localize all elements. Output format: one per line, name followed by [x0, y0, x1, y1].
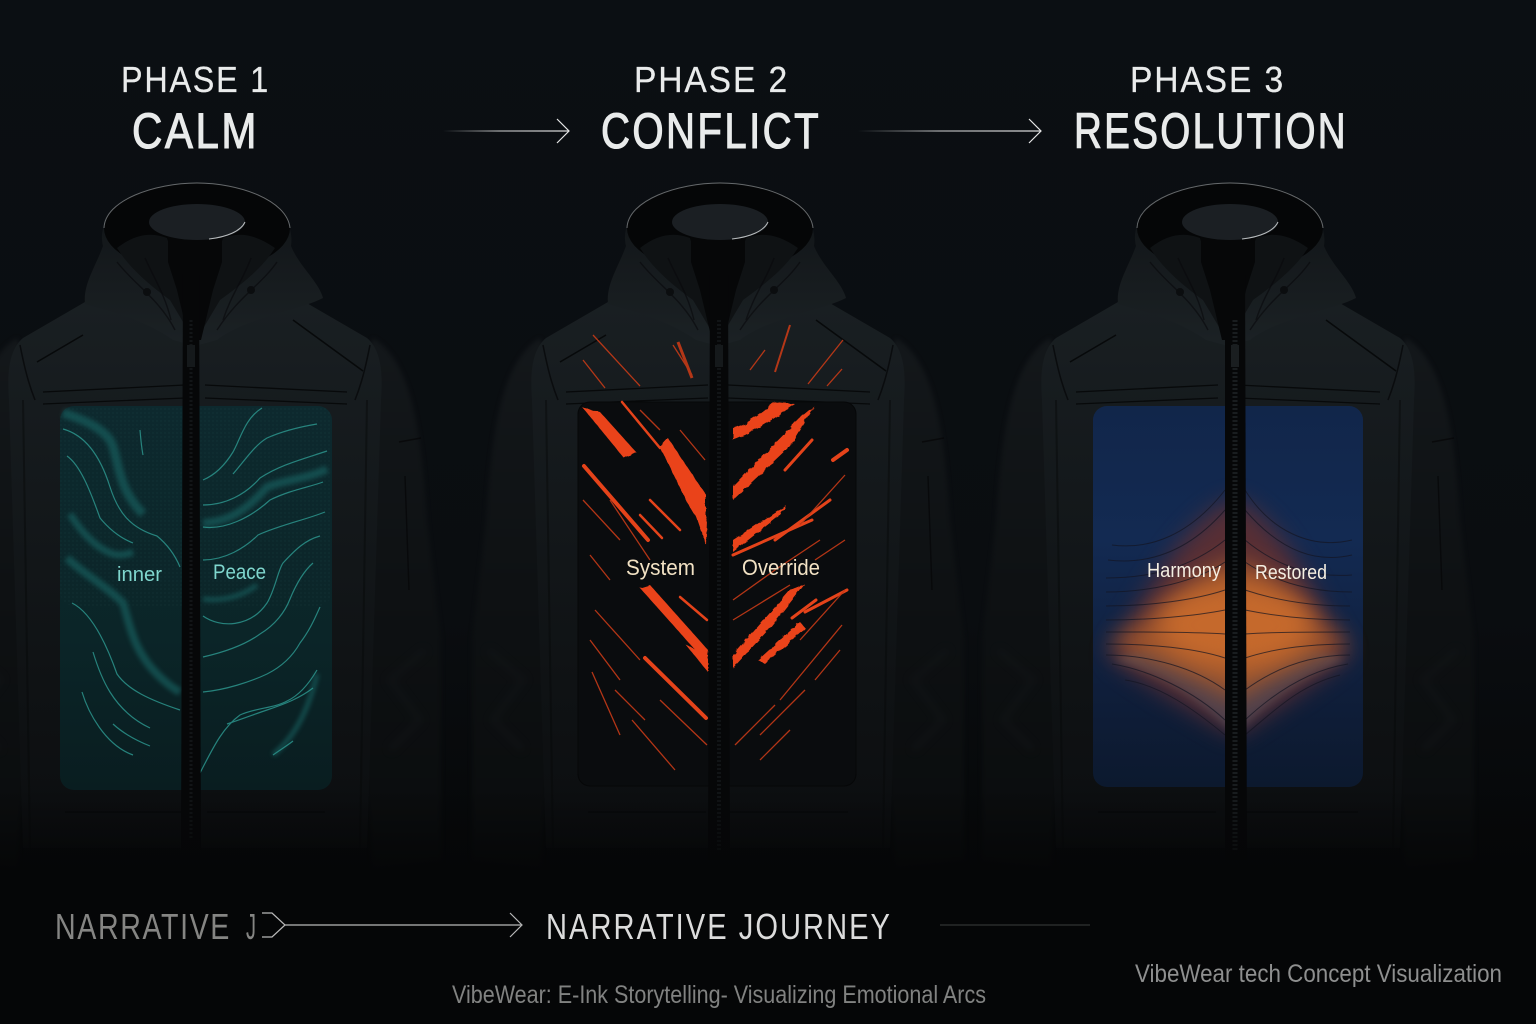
- narrative journey ghost label: J: [246, 906, 256, 947]
- panel: phase 2 conflict jacket: [472, 182, 964, 868]
- text: System: System: [626, 555, 695, 580]
- heading: phase 1: [121, 59, 270, 159]
- heading: phase 3: [1074, 59, 1348, 159]
- jacket silhouette 1: [0, 182, 441, 868]
- text: Override: Override: [742, 555, 820, 580]
- jacket silhouette 2: [472, 182, 964, 868]
- e-ink display: orange slashes: [578, 325, 856, 786]
- caption: title: VibeWear: E-Ink Storytelling- Visualizing Emotional Arcs: [452, 981, 986, 1009]
- heading: phase 1: CALM: [132, 103, 259, 159]
- narrative journey arrow: [262, 913, 522, 937]
- e-ink display: teal waves: [60, 406, 332, 790]
- heading: phase 2: CONFLICT: [601, 103, 821, 159]
- panel: phase 3 resolution jacket: [982, 182, 1474, 868]
- zipper 1: [181, 270, 201, 850]
- heading: phase 1: PHASE 1: [121, 59, 270, 100]
- faint line: [940, 924, 1090, 926]
- heading: phase 3: PHASE 3: [1130, 59, 1285, 100]
- zipper 2: [708, 270, 730, 860]
- heading: phase 2: [601, 59, 821, 159]
- text: Harmony: Harmony: [1147, 560, 1221, 582]
- heading: phase 3: RESOLUTION: [1074, 103, 1348, 159]
- heading: phase 2: PHASE 2: [634, 59, 789, 100]
- panel: phase 1 calm jacket: [0, 182, 441, 868]
- text: inner: inner: [117, 564, 162, 586]
- text: Peace: Peace: [213, 561, 266, 584]
- arrow: calm to conflict: [443, 119, 569, 143]
- arrow: conflict to resolution: [858, 119, 1041, 143]
- narrative journey ghost label: NARRATIVE: [55, 906, 231, 947]
- caption: concept visualization: VibeWear tech Concept Visualization: [1135, 960, 1502, 988]
- jacket silhouette 3: [982, 182, 1474, 868]
- e-ink display: blue and orange glow: [1093, 406, 1363, 787]
- narrative journey label: NARRATIVE JOURNEY: [546, 906, 892, 947]
- text: Restored: Restored: [1255, 562, 1327, 584]
- zipper 3: [1225, 270, 1247, 860]
